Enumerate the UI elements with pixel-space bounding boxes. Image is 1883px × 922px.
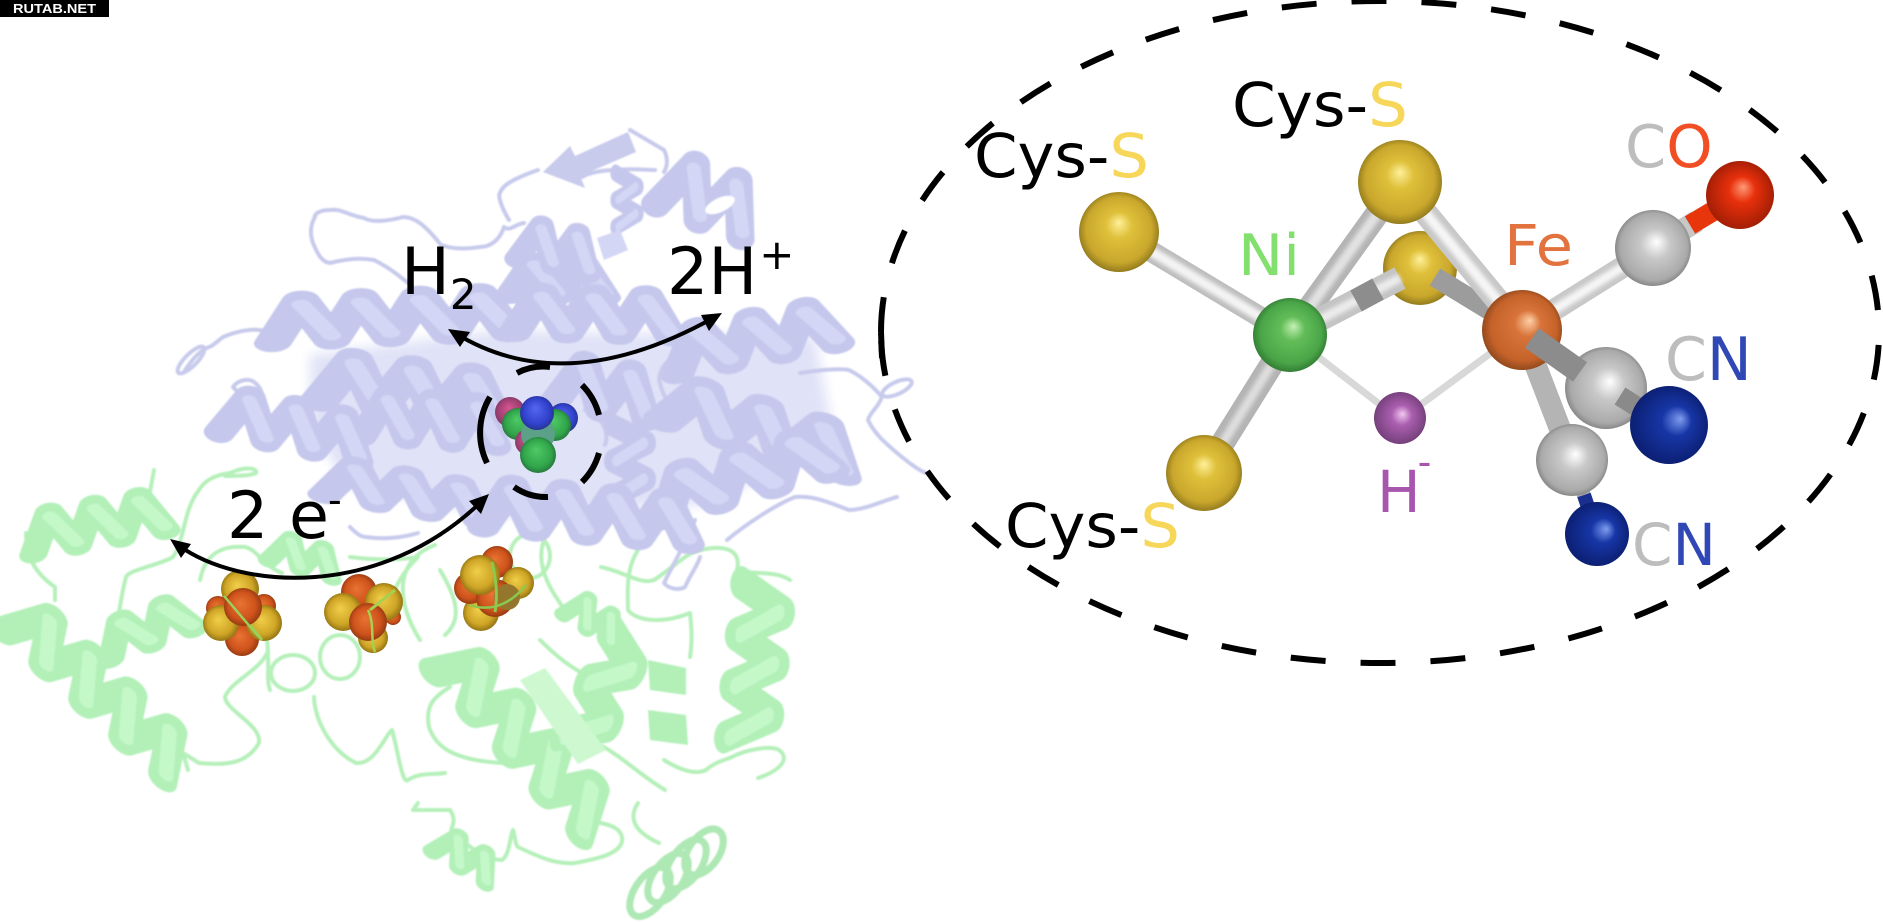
blue helix: top row left <box>271 291 510 343</box>
label: H2: H <box>401 235 450 310</box>
label: 2 e-: - <box>328 478 342 522</box>
protein: blue large subunit <box>174 130 926 589</box>
watermark <box>0 0 109 17</box>
hydride atom <box>1374 392 1426 444</box>
dark bond Fe to CN <box>1532 338 1580 372</box>
green helix: central lower <box>433 641 614 835</box>
blue helix: central vertical <box>612 425 648 497</box>
thin bonds to hydride <box>1290 330 1522 420</box>
carbon of CO <box>1615 210 1691 286</box>
green coil: bottom ring <box>622 822 731 922</box>
watermark: RUTAB.NET <box>13 2 96 16</box>
green short helix block lower <box>648 710 688 745</box>
blue helix: top row right <box>514 291 672 337</box>
green helix: short left <box>99 596 195 660</box>
blue helix: right middle <box>663 378 855 475</box>
iron atom <box>1482 290 1562 370</box>
blue loops <box>174 130 926 589</box>
blue helix: top-right coil <box>655 155 760 238</box>
green helix: central right <box>561 628 648 752</box>
blue helix: bottom long <box>483 483 692 544</box>
iron-sulfur cluster 1 <box>203 570 282 656</box>
green short helix block <box>648 660 686 695</box>
label: CO: CO <box>1625 112 1713 181</box>
sulfur atom bottom <box>1166 435 1242 511</box>
green helix: long left <box>3 598 193 778</box>
large dashed ellipse <box>881 1 1879 663</box>
iron-sulfur cluster 2 <box>324 574 403 653</box>
blue helix: right upper <box>670 302 838 374</box>
label: 2H+: 2H <box>667 235 757 310</box>
oxygen atom <box>1706 161 1774 229</box>
arrow: electron transfer <box>170 494 489 578</box>
label: hydride: H <box>1377 458 1421 526</box>
green helix: under label <box>268 533 339 579</box>
blue helix: left <box>219 391 367 461</box>
blue helix: centre <box>554 357 655 420</box>
label: Cys-S left: Cys-S <box>974 121 1149 192</box>
sulfur atom left <box>1079 192 1159 272</box>
blue short strand <box>597 230 628 260</box>
blue helix: top core upper <box>516 221 596 274</box>
nitrogen atom lower <box>1565 502 1629 566</box>
blue ring <box>703 192 737 218</box>
green helix: upper left <box>27 492 166 554</box>
active site spheres <box>495 396 578 473</box>
label: Cys-S bottom: Cys-S <box>1005 491 1180 562</box>
label: Ni: Ni <box>1238 223 1300 289</box>
blue helix: right lower <box>654 430 832 520</box>
green short helix top <box>562 591 624 644</box>
sulfur behind <box>1383 231 1457 305</box>
label: Cys-S top: Cys-S <box>1232 70 1408 141</box>
label: H2: 2 <box>450 270 477 319</box>
green beta sheet <box>520 668 606 764</box>
green loops <box>26 468 790 863</box>
blue underlay <box>310 330 835 515</box>
protein: green small subunit <box>3 468 790 922</box>
sulfur atom top <box>1358 140 1442 224</box>
label: 2 e-: 2 e <box>227 479 329 554</box>
blue helix: middle row <box>362 393 500 446</box>
label: CN upper: CN <box>1665 325 1752 395</box>
label: Fe: Fe <box>1504 214 1573 279</box>
blue helix: bottom left <box>324 460 485 523</box>
nitrogen atom upper <box>1630 386 1708 464</box>
label: hydride: - <box>1418 440 1431 484</box>
label: CN lower: CN <box>1632 511 1716 579</box>
small dashed circle around active site <box>480 367 599 497</box>
arrow: H2 to 2H+ <box>448 313 722 363</box>
iron-sulfur cluster 3 <box>454 546 534 631</box>
blue beta strand arrow <box>543 132 636 188</box>
blue helix: top narrow <box>615 173 639 227</box>
dark bond C to N <box>1620 396 1650 415</box>
bonds <box>1119 182 1740 534</box>
nickel atom <box>1253 298 1327 372</box>
upper carbon of CN <box>1565 347 1647 429</box>
active site ball-and-stick model <box>1079 140 1774 566</box>
lower carbon of CN <box>1536 424 1608 496</box>
blue helix: top core <box>510 260 606 298</box>
green helix: bottom fragment <box>432 828 500 884</box>
green helix: far right <box>725 583 787 742</box>
blue helix: second row <box>319 355 503 423</box>
label: 2H+: + <box>759 230 794 279</box>
